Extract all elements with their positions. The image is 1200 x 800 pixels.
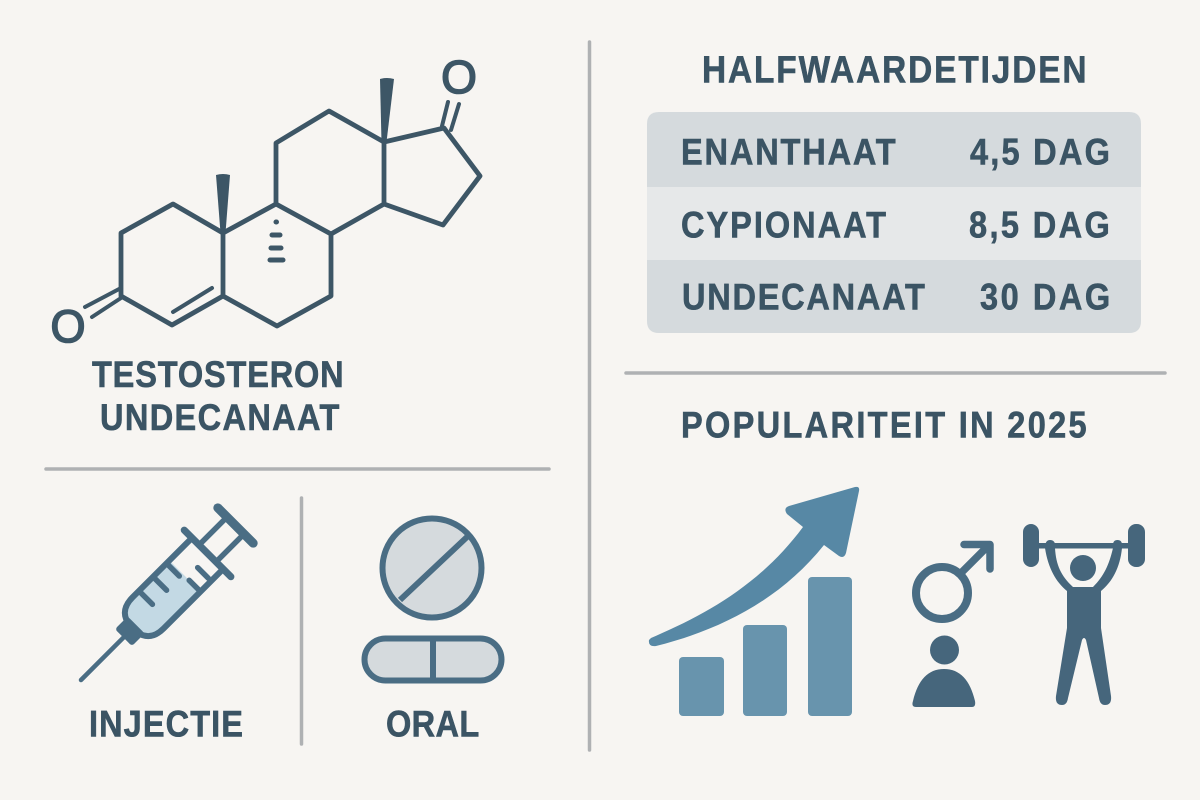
icon: weightlifter [1023, 524, 1145, 705]
label: oral: ORAL [386, 704, 479, 745]
icon: person [912, 636, 975, 707]
icon: capsule tablet [364, 638, 502, 681]
row: undecanaat: UNDECANAAT [682, 277, 925, 318]
panel: molecule [50, 51, 480, 438]
label: injectie: INJECTIE [89, 704, 243, 745]
heading: compound name: TESTOSTERON [92, 354, 344, 395]
row: enanthaat: 4,5 DAG [970, 132, 1110, 173]
row: enanthaat [681, 132, 1110, 173]
row: cypionaat [681, 205, 1110, 246]
heading: compound name: UNDECANAAT [100, 397, 339, 438]
panel: oral [364, 518, 502, 745]
table: half-lives [647, 112, 1141, 333]
atom label left: O [50, 301, 86, 352]
icon: male symbol [916, 544, 990, 619]
panel: injection [58, 502, 259, 745]
panel: half-lives [647, 49, 1141, 333]
panel: popularity [649, 405, 1145, 716]
heading: popularity: POPULARITEIT IN 2025 [681, 405, 1087, 446]
heading: half-lives: HALFWAARDETIJDEN [702, 49, 1087, 91]
row: cypionaat: 8,5 DAG [969, 205, 1110, 246]
chemical structure [85, 78, 480, 326]
bar chart [679, 577, 852, 716]
row: cypionaat: CYPIONAAT [681, 205, 886, 246]
icon: syringe [58, 502, 259, 703]
row: undecanaat: 30 DAG [980, 277, 1110, 318]
icon: round tablet [382, 518, 482, 618]
row: enanthaat: ENANTHAAT [681, 132, 896, 173]
heading: compound name [92, 354, 344, 438]
arrow: upward trend [649, 487, 859, 646]
atom label top: O [441, 51, 477, 103]
row: undecanaat [682, 277, 1110, 318]
